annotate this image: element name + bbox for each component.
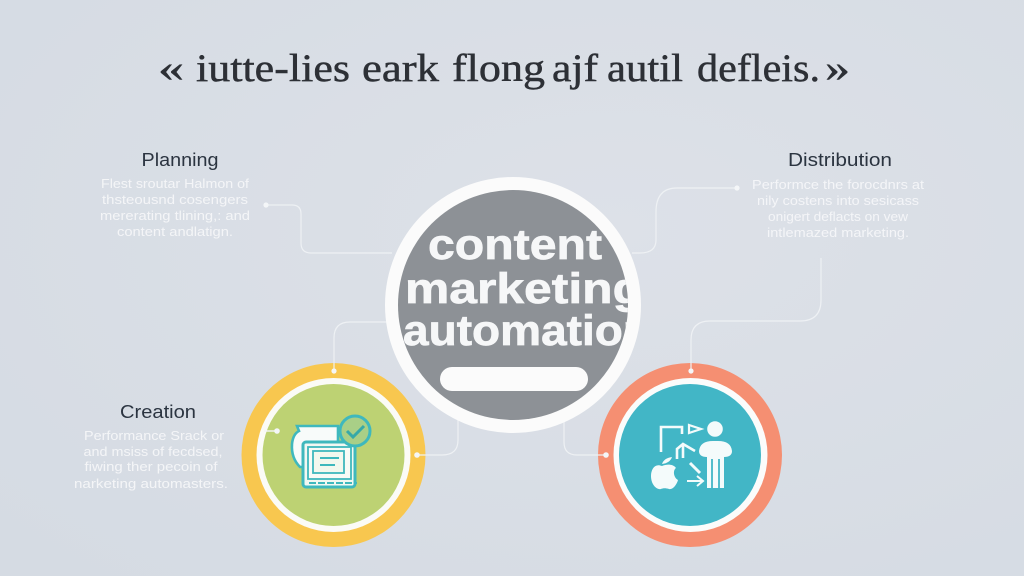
text block: distribution: nily costens into sesicass: [757, 194, 919, 208]
heading: planning: Planning: [142, 149, 218, 170]
connector: distribution: [632, 185, 740, 253]
central title: [404, 230, 628, 346]
connector: planning: [263, 202, 392, 253]
text block: distribution: [752, 178, 925, 240]
text block: distribution: onigert deflacts on vew: [768, 210, 909, 224]
title: »: [825, 47, 850, 90]
title: «: [158, 47, 184, 90]
text block: planning: [100, 177, 250, 239]
text block: planning: thsteousnd cosengers: [102, 193, 248, 207]
title: defleis.: [697, 47, 820, 90]
connector: central to creation: [331, 322, 398, 374]
panel: planning text: [100, 149, 250, 239]
heading: creation: Creation: [120, 401, 196, 422]
title: eark: [362, 47, 440, 90]
connector: creation text to circle: [264, 428, 280, 434]
central pill: [440, 367, 588, 391]
central title: content: [428, 221, 602, 269]
panel: creation text: [74, 401, 228, 491]
text block: creation: and msiss of fecdsed,: [84, 445, 222, 459]
text block: creation: [74, 429, 228, 491]
text block: creation: narketing automasters.: [74, 477, 228, 491]
title: [158, 47, 850, 90]
title: iutte-lies: [196, 47, 350, 90]
text block: creation: Performance Srack or: [84, 429, 224, 443]
title: flong: [452, 47, 545, 90]
text block: planning: Flest sroutar Halmon of: [101, 177, 250, 191]
central title: automation: [403, 307, 651, 355]
connector: central to creation circle: [414, 420, 458, 458]
connector: distribution to coral circle: [688, 258, 821, 374]
text block: creation: fiwing ther pecoin of: [84, 460, 218, 474]
heading: distribution: Distribution: [788, 149, 892, 170]
text block: distribution: Performce the forocdnrs at: [752, 178, 925, 192]
text block: planning: mererating tlining,: and: [100, 209, 250, 223]
text block: distribution: intlemazed marketing.: [767, 226, 909, 240]
central circle: [385, 177, 651, 433]
connector: central to distribution circle: [564, 420, 609, 458]
icon: documents with check: [292, 416, 370, 487]
text block: planning: content andlatign.: [117, 225, 233, 239]
creation circle: [242, 363, 426, 547]
title: autil: [607, 47, 683, 90]
central title: marketing: [405, 265, 643, 313]
panel: distribution text: [752, 149, 925, 240]
icon: person with flow and apple: [651, 421, 732, 489]
distribution circle: [598, 363, 782, 547]
title: ajf: [552, 47, 598, 90]
